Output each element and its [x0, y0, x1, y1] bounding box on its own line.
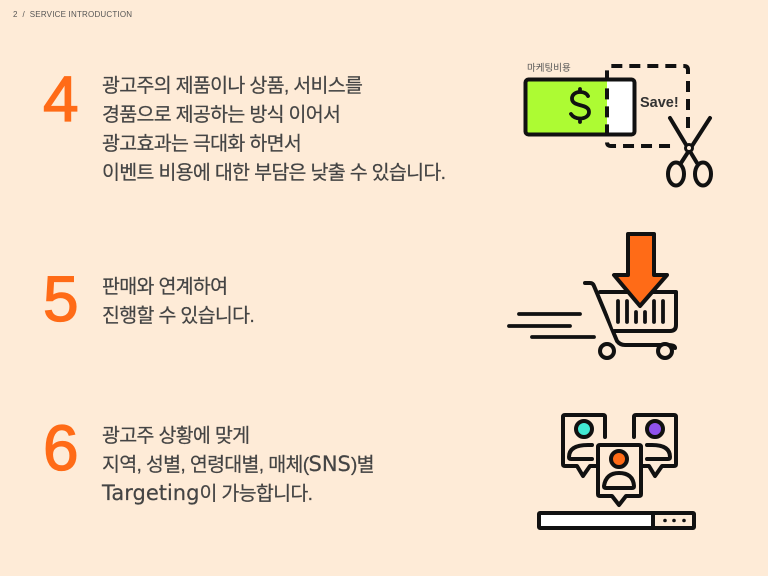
text block 6: 지역, 성별, 연령대별, 매체(SNS)별 [102, 452, 374, 476]
text block 6: Targeting이 가능합니다. [102, 480, 312, 504]
speed lines [509, 314, 594, 337]
text block 5: 진행할 수 있습니다. [102, 305, 254, 327]
icon: marketing cost cut [526, 63, 711, 186]
text block 4: 이벤트 비용에 대한 부담은 낮출 수 있습니다. [102, 162, 445, 184]
text block 4: 광고주의 제품이나 상품, 서비스를 [102, 75, 362, 97]
cart [585, 283, 675, 348]
text block 4: 광고효과는 극대화 하면서 [102, 133, 301, 155]
down arrow [614, 234, 667, 306]
number 4: 4 [43, 63, 79, 135]
profile card centre [598, 445, 641, 505]
profile card left [563, 415, 605, 476]
text block 5: 판매와 연계하여 [102, 276, 227, 298]
profile card right [634, 415, 676, 476]
icon: targeting profiles [539, 415, 694, 528]
icon: shopping cart with arrow [509, 234, 676, 358]
cart bars [618, 301, 663, 322]
number 5: 5 [43, 263, 79, 335]
page header: 2 / SERVICE INTRODUCTION [13, 10, 132, 19]
money bill [526, 80, 634, 134]
text block 4: 경품으로 제공하는 방식 이어서 [102, 104, 340, 126]
text block 5 [102, 276, 254, 327]
label: save: Save! [640, 95, 679, 111]
text block 6 [102, 424, 374, 505]
scissors [668, 118, 711, 186]
number 6: 6 [43, 412, 79, 484]
search bar [539, 513, 694, 528]
text block 4 [102, 75, 445, 184]
dashed cut line [607, 66, 688, 146]
text block 6: 광고주 상황에 맞게 [102, 424, 249, 446]
label: marketing cost: 마케팅비용 [527, 63, 571, 74]
